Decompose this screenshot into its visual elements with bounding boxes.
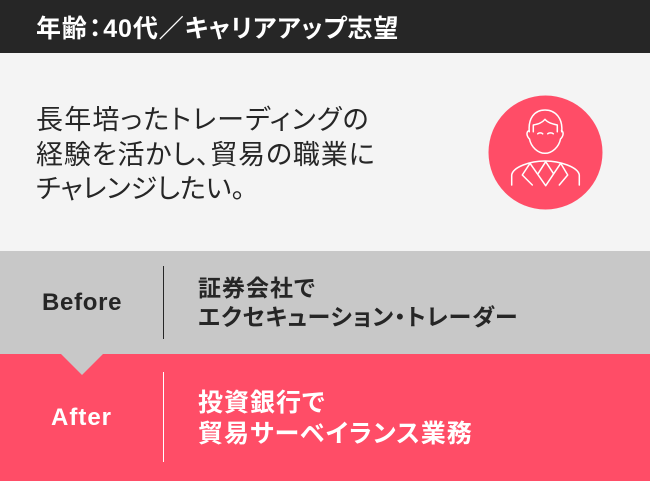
before text [198, 275, 518, 330]
before label: Before [42, 289, 122, 316]
after label: After [51, 404, 112, 431]
statement text: 長年培ったトレーディングの [36, 105, 370, 135]
panel: before [0, 251, 650, 354]
arrow pointer [61, 354, 103, 375]
before divider [163, 266, 164, 339]
before text: エクセキューション・トレーダー [198, 304, 518, 330]
icon: businessman [488, 96, 602, 210]
after text: 貿易サーベイランス業務 [198, 420, 473, 448]
header bar [0, 0, 650, 53]
header title: 年齢：40代／キャリアアップ志望 [36, 15, 399, 43]
after text: 投資銀行で [198, 389, 326, 417]
after divider [163, 372, 164, 462]
statement text [36, 105, 375, 204]
after text [198, 389, 473, 448]
before text: 証券会社で [198, 275, 316, 301]
panel: statement [0, 53, 650, 251]
panel: after [0, 354, 650, 481]
statement text: チャレンジしたい。 [36, 174, 245, 204]
statement text: 経験を活かし、貿易の職業に [36, 140, 375, 170]
